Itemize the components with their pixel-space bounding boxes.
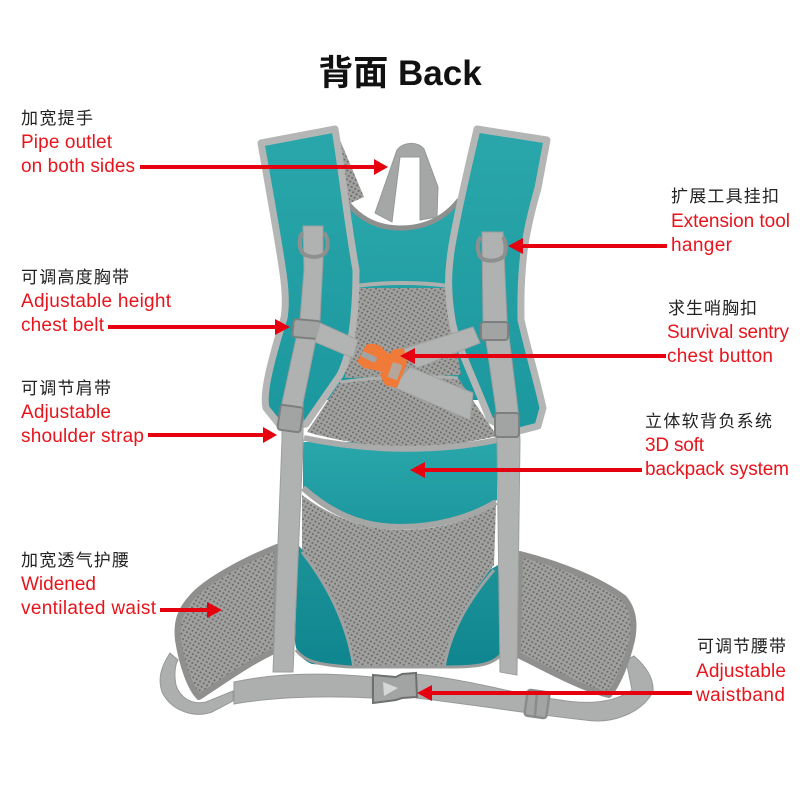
waist buckle [373,673,417,703]
lower mesh panel [302,495,496,668]
top handle [375,143,438,222]
label: ventilated waist: ventilated waist [21,598,157,619]
arrow: shoulder strap [148,427,277,443]
label: ventilated waist [21,551,157,619]
lower teal back panel [303,442,497,528]
label: chest belt: Adjustable height [21,291,172,312]
left strap buckles [277,319,321,433]
upper teal back panel [315,200,485,400]
label: extension tool hanger: 扩展工具挂扣 [671,187,779,206]
label: chest button: Survival sentry [667,322,790,343]
waist strap adjuster [524,690,550,718]
label: chest belt: chest belt [21,315,105,336]
label: shoulder strap: Adjustable [21,402,111,423]
title: 背面 Back [318,54,482,93]
middle mesh [307,377,497,447]
arrow: ventilated waist [160,602,222,618]
label: backpack system: 立体软背负系统 [645,412,772,431]
waist pad right [518,554,633,695]
label: ventilated waist: Widened [21,574,96,595]
left D-ring [300,233,328,257]
label: shoulder strap: 可调节肩带 [21,379,111,398]
lower teal side panels [295,545,362,668]
label: extension tool hanger: Extension tool [671,211,790,232]
label: chest button: chest button [667,346,773,367]
label: extension tool hanger: hanger [671,235,733,256]
right D-ring [478,237,506,261]
label: chest button: 求生哨胸扣 [668,299,757,318]
label: pipe outlet: on both sides [21,156,135,177]
right strap buckles [481,322,519,437]
label: shoulder strap [21,379,144,447]
arrow: waistband [417,685,692,701]
label: waistband: Adjustable [696,661,786,682]
label: chest belt [21,268,172,336]
label: pipe outlet [21,109,135,177]
label: ventilated waist: 加宽透气护腰 [21,551,129,570]
right shoulder strap [482,232,520,675]
label: chest button [667,299,790,367]
arrow: chest button [400,348,666,364]
backpack illustration [160,129,653,721]
label: waistband: waistband [695,685,785,706]
right shoulder wing [449,129,547,432]
label: pipe outlet: 加宽提手 [21,109,93,128]
orange chest buckle [357,344,407,388]
rear mesh and collar [340,140,364,205]
waist pad left [178,547,277,697]
label: backpack system: backpack system [645,459,789,480]
arrow: backpack system [410,462,642,478]
arrow: pipe outlet [140,159,388,175]
label: backpack system: 3D soft [645,435,705,456]
left shoulder strap [273,226,323,672]
label: waistband [695,637,786,706]
label: extension tool hanger [671,187,790,256]
arrow: chest belt [108,319,290,335]
left shoulder wing [261,129,356,428]
upper mesh [345,288,461,378]
label: backpack system [645,412,789,480]
label: shoulder strap: shoulder strap [21,426,144,447]
label: waistband: 可调节腰带 [697,637,786,656]
label: pipe outlet: Pipe outlet [21,132,113,153]
arrow: extension tool hanger [508,238,667,254]
waist strap [160,653,653,721]
label: chest belt: 可调高度胸带 [21,268,129,287]
chest straps [315,323,480,420]
